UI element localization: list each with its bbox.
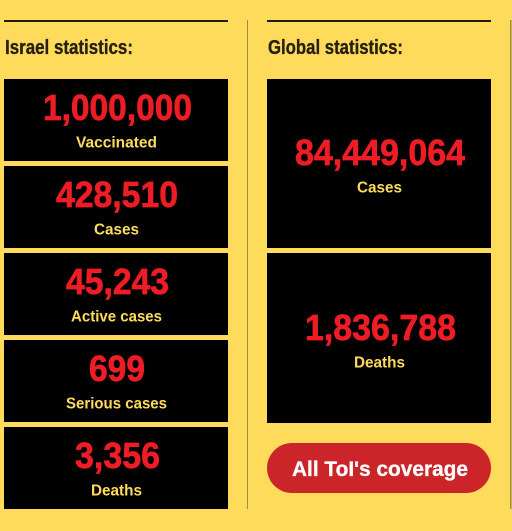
stat card: serious cases [4, 340, 228, 422]
stat card: cases [4, 166, 228, 248]
stat card: vaccinated: 1,000,000 [43, 87, 192, 128]
heading: Israel statistics: Israel statistics: [5, 37, 133, 59]
stat card: deaths: 3,356 [75, 435, 160, 476]
panel: Israel statistics [4, 20, 228, 509]
button: All ToI's coverage [267, 443, 491, 493]
stat card: global deaths [267, 253, 491, 423]
stat card: deaths [4, 427, 228, 509]
stat card: deaths: Deaths [91, 482, 142, 500]
stat card: active cases [4, 253, 228, 335]
stat card: global deaths: 1,836,788 [305, 307, 456, 348]
button: All ToI's coverage: All ToI's coverage [292, 458, 468, 481]
stat card: cases: Cases [94, 222, 139, 238]
stat card: global cases [267, 79, 491, 248]
stat card: active cases: 45,243 [66, 261, 169, 302]
stat card: active cases: Active cases [71, 308, 162, 326]
heading: Global statistics: Global statistics: [268, 37, 403, 59]
stat card: global deaths: Deaths [354, 354, 405, 372]
stat card: global cases: 84,449,064 [295, 132, 465, 173]
stat card: global cases: Cases [357, 180, 402, 196]
stat card: vaccinated [4, 79, 228, 161]
stat card: serious cases: 699 [89, 348, 145, 389]
stat card: serious cases: Serious cases [66, 396, 167, 412]
stat card: vaccinated: Vaccinated [76, 134, 157, 152]
panel: Global statistics [267, 20, 491, 493]
stat card: cases: 428,510 [56, 174, 178, 215]
